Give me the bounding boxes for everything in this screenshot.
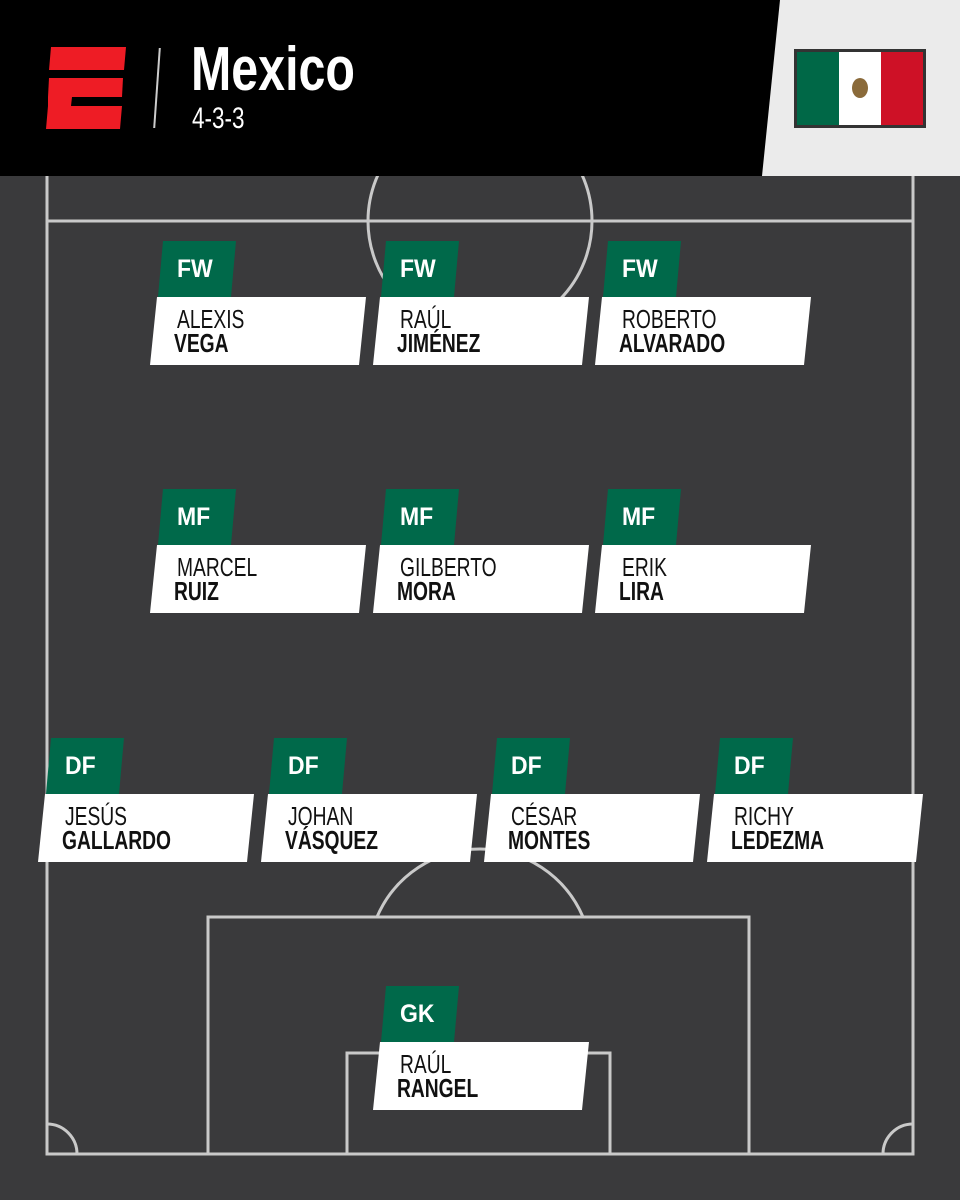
card: Erik Lira	[595, 489, 811, 613]
card: Alexis Vega	[150, 241, 366, 365]
card: Raúl Jiménez: JIMÉNEZ	[397, 328, 480, 358]
card: César Montes: MONTES	[508, 825, 590, 855]
card: Richy Ledezma	[707, 738, 923, 862]
subtitle: formation: 4-3-3	[192, 102, 245, 135]
card: César Montes: CÉSAR	[511, 801, 577, 831]
title: Mexico	[191, 35, 355, 104]
card: Richy Ledezma: RICHY	[734, 801, 794, 831]
card: Roberto Alvarado	[595, 241, 811, 365]
card: Raúl Rangel: GK	[400, 1000, 434, 1028]
card: Jesús Gallardo: GALLARDO	[62, 825, 171, 855]
card: Raúl Jiménez: RAÚL	[400, 304, 451, 334]
card: César Montes: DF	[511, 752, 542, 780]
card: Alexis Vega: FW	[177, 255, 213, 283]
card: Raúl Jiménez: FW	[400, 255, 436, 283]
card: Johan Vásquez: VÁSQUEZ	[285, 825, 378, 855]
card: Roberto Alvarado: ROBERTO	[622, 304, 716, 334]
card: Raúl Rangel: RANGEL	[397, 1073, 478, 1103]
icon: ESPN logo	[46, 47, 126, 129]
card: Jesús Gallardo: JESÚS	[65, 801, 127, 831]
card: Raúl Rangel: RAÚL	[400, 1049, 451, 1079]
icon: Mexico flag	[794, 49, 926, 128]
card: Gilberto Mora: MF	[400, 503, 433, 531]
card: Gilberto Mora: MORA	[397, 576, 456, 606]
card: Erik Lira: ERIK	[622, 552, 667, 582]
header	[0, 0, 960, 176]
card: Richy Ledezma: LEDEZMA	[731, 825, 824, 855]
flag panel background	[762, 0, 960, 176]
card: Gilberto Mora: GILBERTO	[400, 552, 497, 582]
card: Roberto Alvarado: ALVARADO	[619, 328, 725, 358]
card: Marcel Ruiz: MF	[177, 503, 210, 531]
card: Johan Vásquez	[261, 738, 477, 862]
card: Johan Vásquez: JOHAN	[288, 801, 353, 831]
card: Jesús Gallardo: DF	[65, 752, 96, 780]
card: Raúl Rangel	[373, 986, 589, 1110]
card: Gilberto Mora	[373, 489, 589, 613]
card: Alexis Vega: ALEXIS	[177, 304, 244, 334]
card: Richy Ledezma: DF	[734, 752, 765, 780]
card: Raúl Jiménez	[373, 241, 589, 365]
card: César Montes	[484, 738, 700, 862]
card: Marcel Ruiz	[150, 489, 366, 613]
card: Alexis Vega: VEGA	[174, 328, 229, 358]
card: Erik Lira: MF	[622, 503, 655, 531]
card: Marcel Ruiz: RUIZ	[174, 576, 219, 606]
card: Erik Lira: LIRA	[619, 576, 664, 606]
card: Jesús Gallardo	[38, 738, 254, 862]
card: Roberto Alvarado: FW	[622, 255, 658, 283]
card: Marcel Ruiz: MARCEL	[177, 552, 257, 582]
card: Johan Vásquez: DF	[288, 752, 319, 780]
divider	[153, 48, 161, 128]
